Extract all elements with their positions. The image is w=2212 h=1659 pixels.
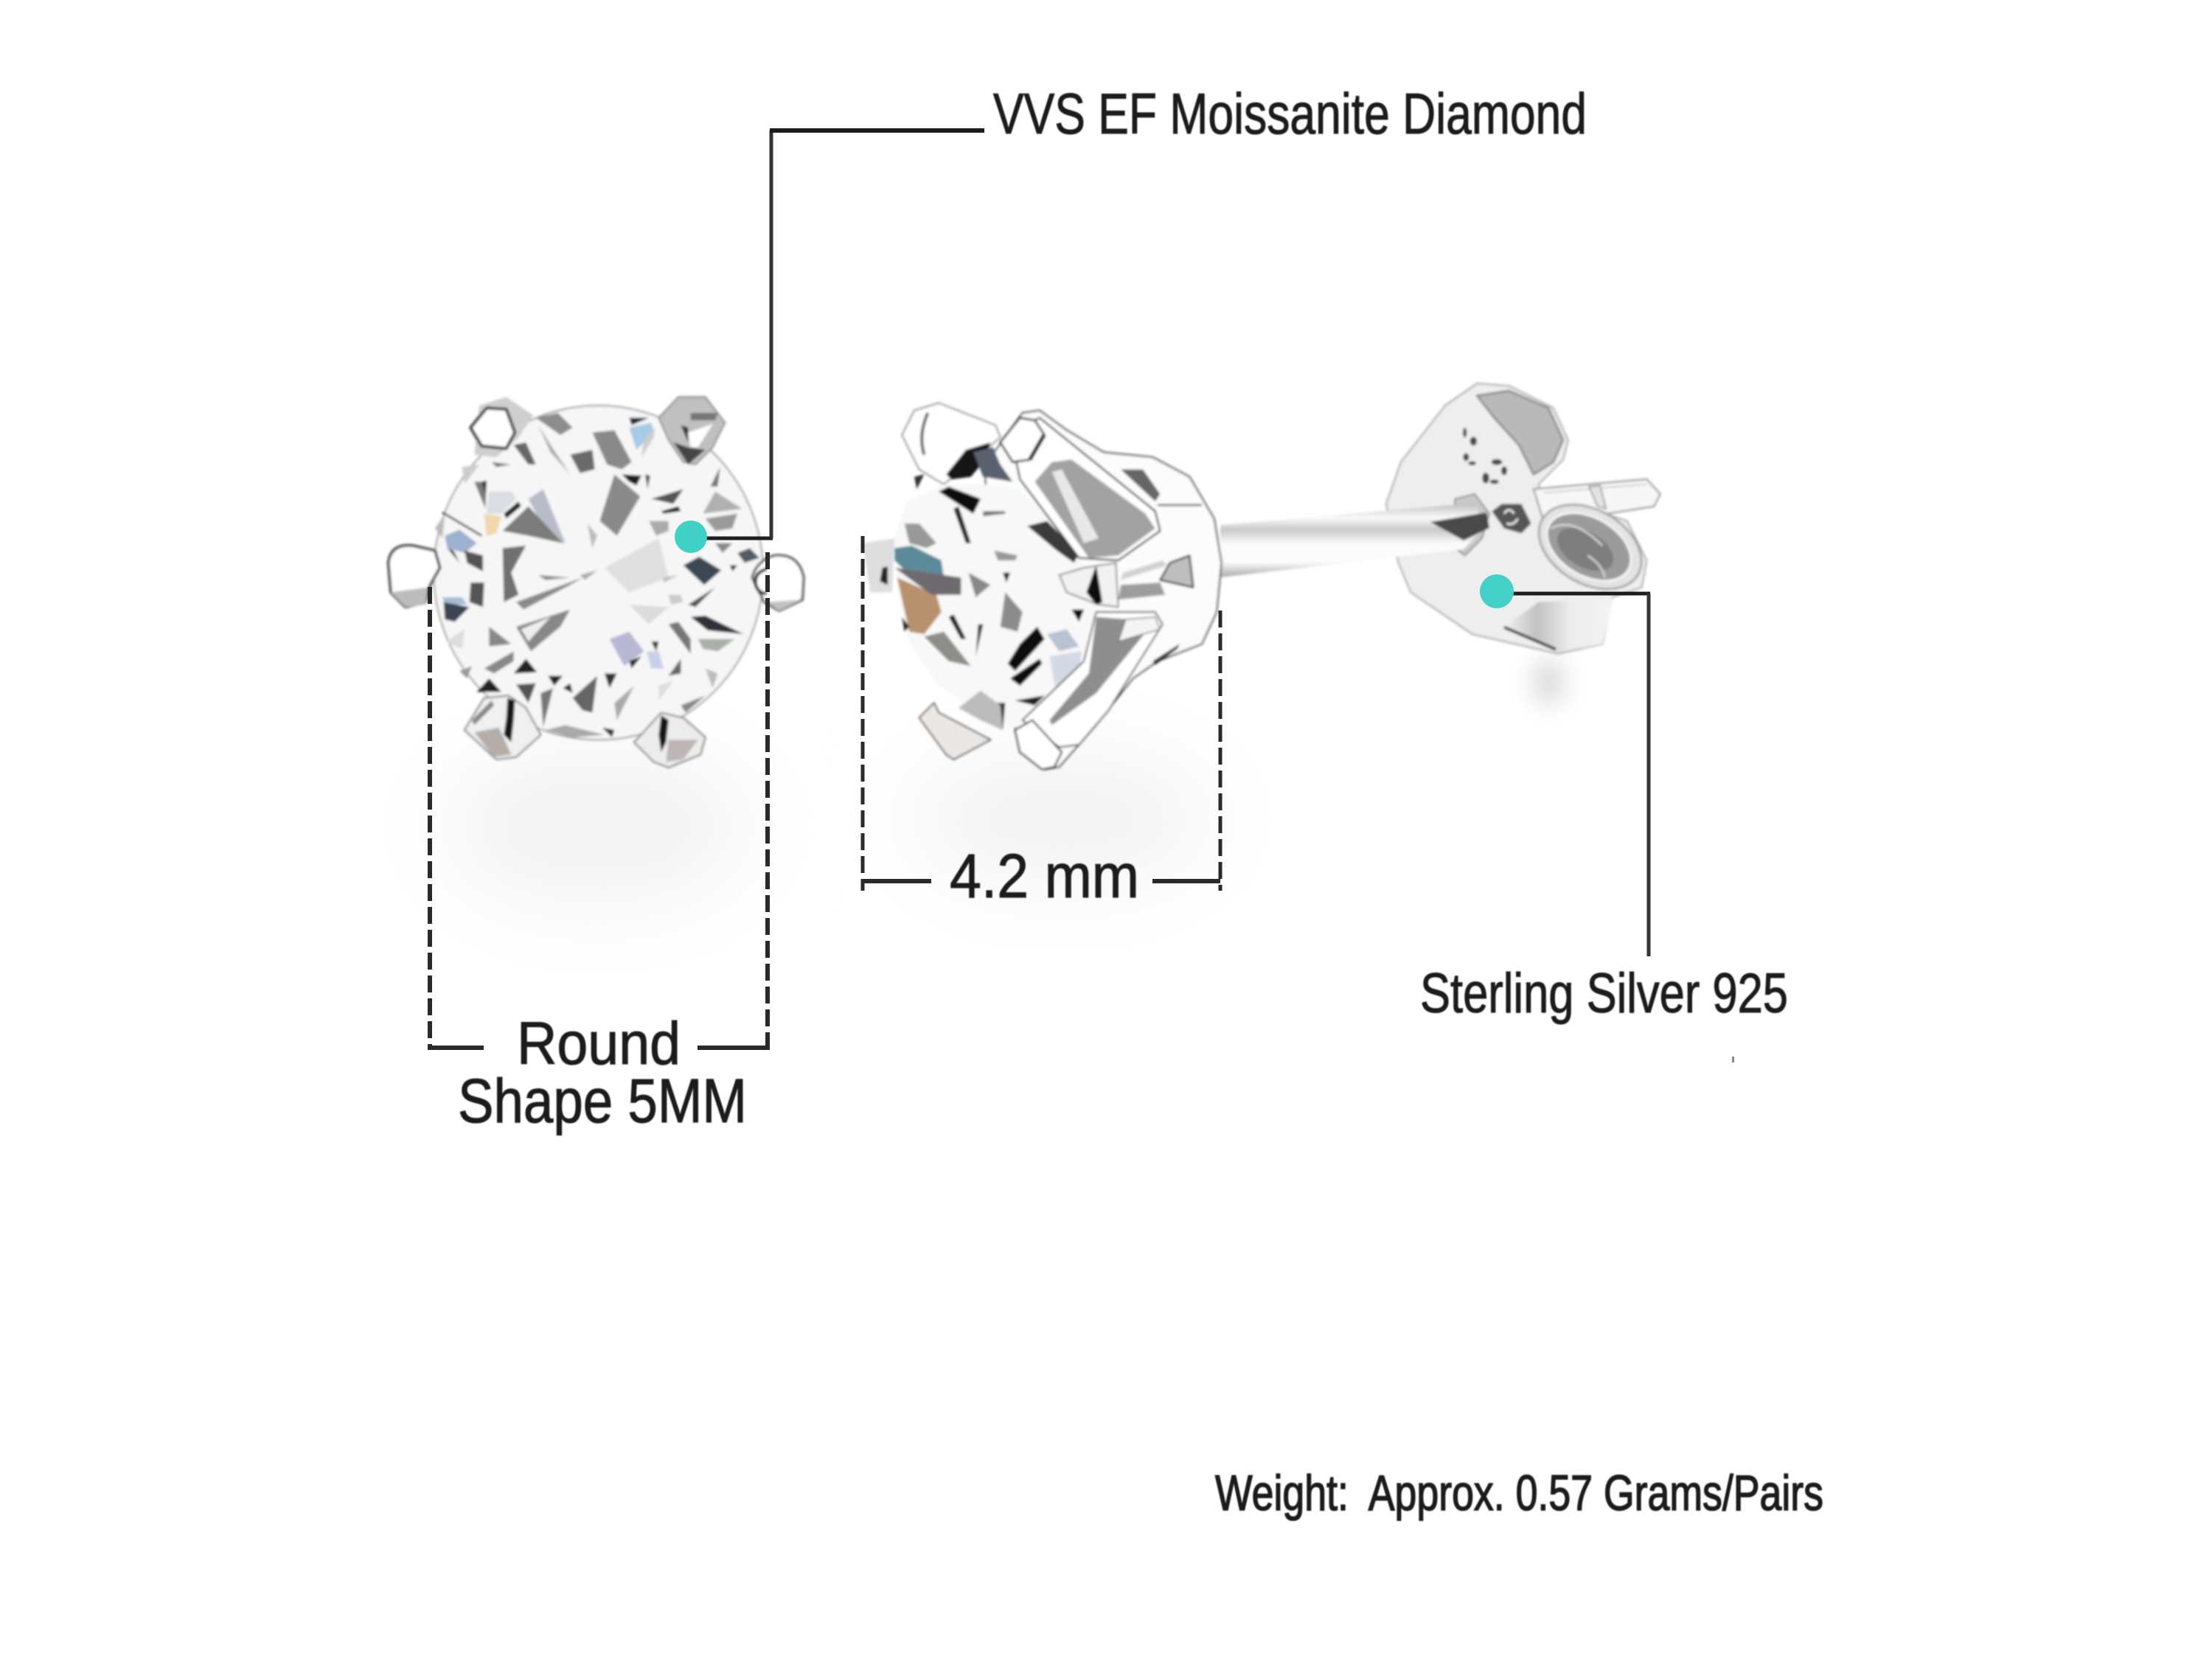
back prong cap — [902, 403, 1001, 484]
label: Shape 5MM: Shape 5MM — [458, 1066, 747, 1135]
stone in profile — [894, 442, 1099, 730]
label: weight: Weight: Approx. 0.57 Grams/Pairs — [1215, 1465, 1823, 1521]
soft ground shadows — [442, 658, 1565, 907]
clutch lower shading — [1504, 599, 1613, 653]
prong: top left — [470, 397, 533, 457]
callout marker dot on the clutch — [1480, 574, 1514, 608]
callout: moissanite leader line — [697, 131, 984, 538]
clutch hub — [1455, 494, 1531, 555]
basket setting — [986, 411, 1222, 769]
prong: bottom right — [634, 713, 706, 768]
post shadow wedge — [1430, 512, 1489, 540]
side view earring: butterfly back, post, basket setting and stone — [863, 383, 1660, 769]
stone body — [434, 406, 763, 740]
front view earring: round moissanite stone with six prongs — [389, 397, 804, 768]
clutch lower cup — [1524, 487, 1657, 606]
clutch upper cup — [1477, 391, 1563, 474]
post tip — [1534, 479, 1660, 521]
prong: top right — [658, 397, 725, 465]
small stray mark — [1732, 1057, 1734, 1062]
butterfly clutch back — [1386, 383, 1660, 654]
label: 4.2 mm: 4.2 mm — [950, 841, 1139, 911]
stone facets — [435, 413, 759, 737]
dimension bracket: 4.2 mm — [863, 536, 1220, 891]
label: VVS EF Moissanite Diamond: VVS EF Moissanite Diamond — [993, 81, 1587, 146]
lower basket prong — [1015, 612, 1163, 769]
side prong: lower left — [919, 691, 1003, 759]
dimension bracket: round shape 5mm — [428, 552, 770, 1048]
upper basket prong — [1001, 418, 1160, 560]
prong: right — [752, 555, 804, 611]
label: Sterling Silver 925: Sterling Silver 925 — [1420, 962, 1788, 1025]
callout: sterling silver leader line — [1512, 594, 1650, 956]
clutch stamped marks — [1463, 428, 1507, 484]
left stub prong — [863, 538, 894, 592]
prong: left — [389, 546, 440, 607]
label: Round: Round — [517, 1010, 681, 1077]
earring post — [1220, 503, 1482, 577]
prong: bottom left — [465, 695, 540, 759]
callout marker dot on the stone — [675, 521, 707, 553]
middle basket prong — [1060, 555, 1193, 607]
